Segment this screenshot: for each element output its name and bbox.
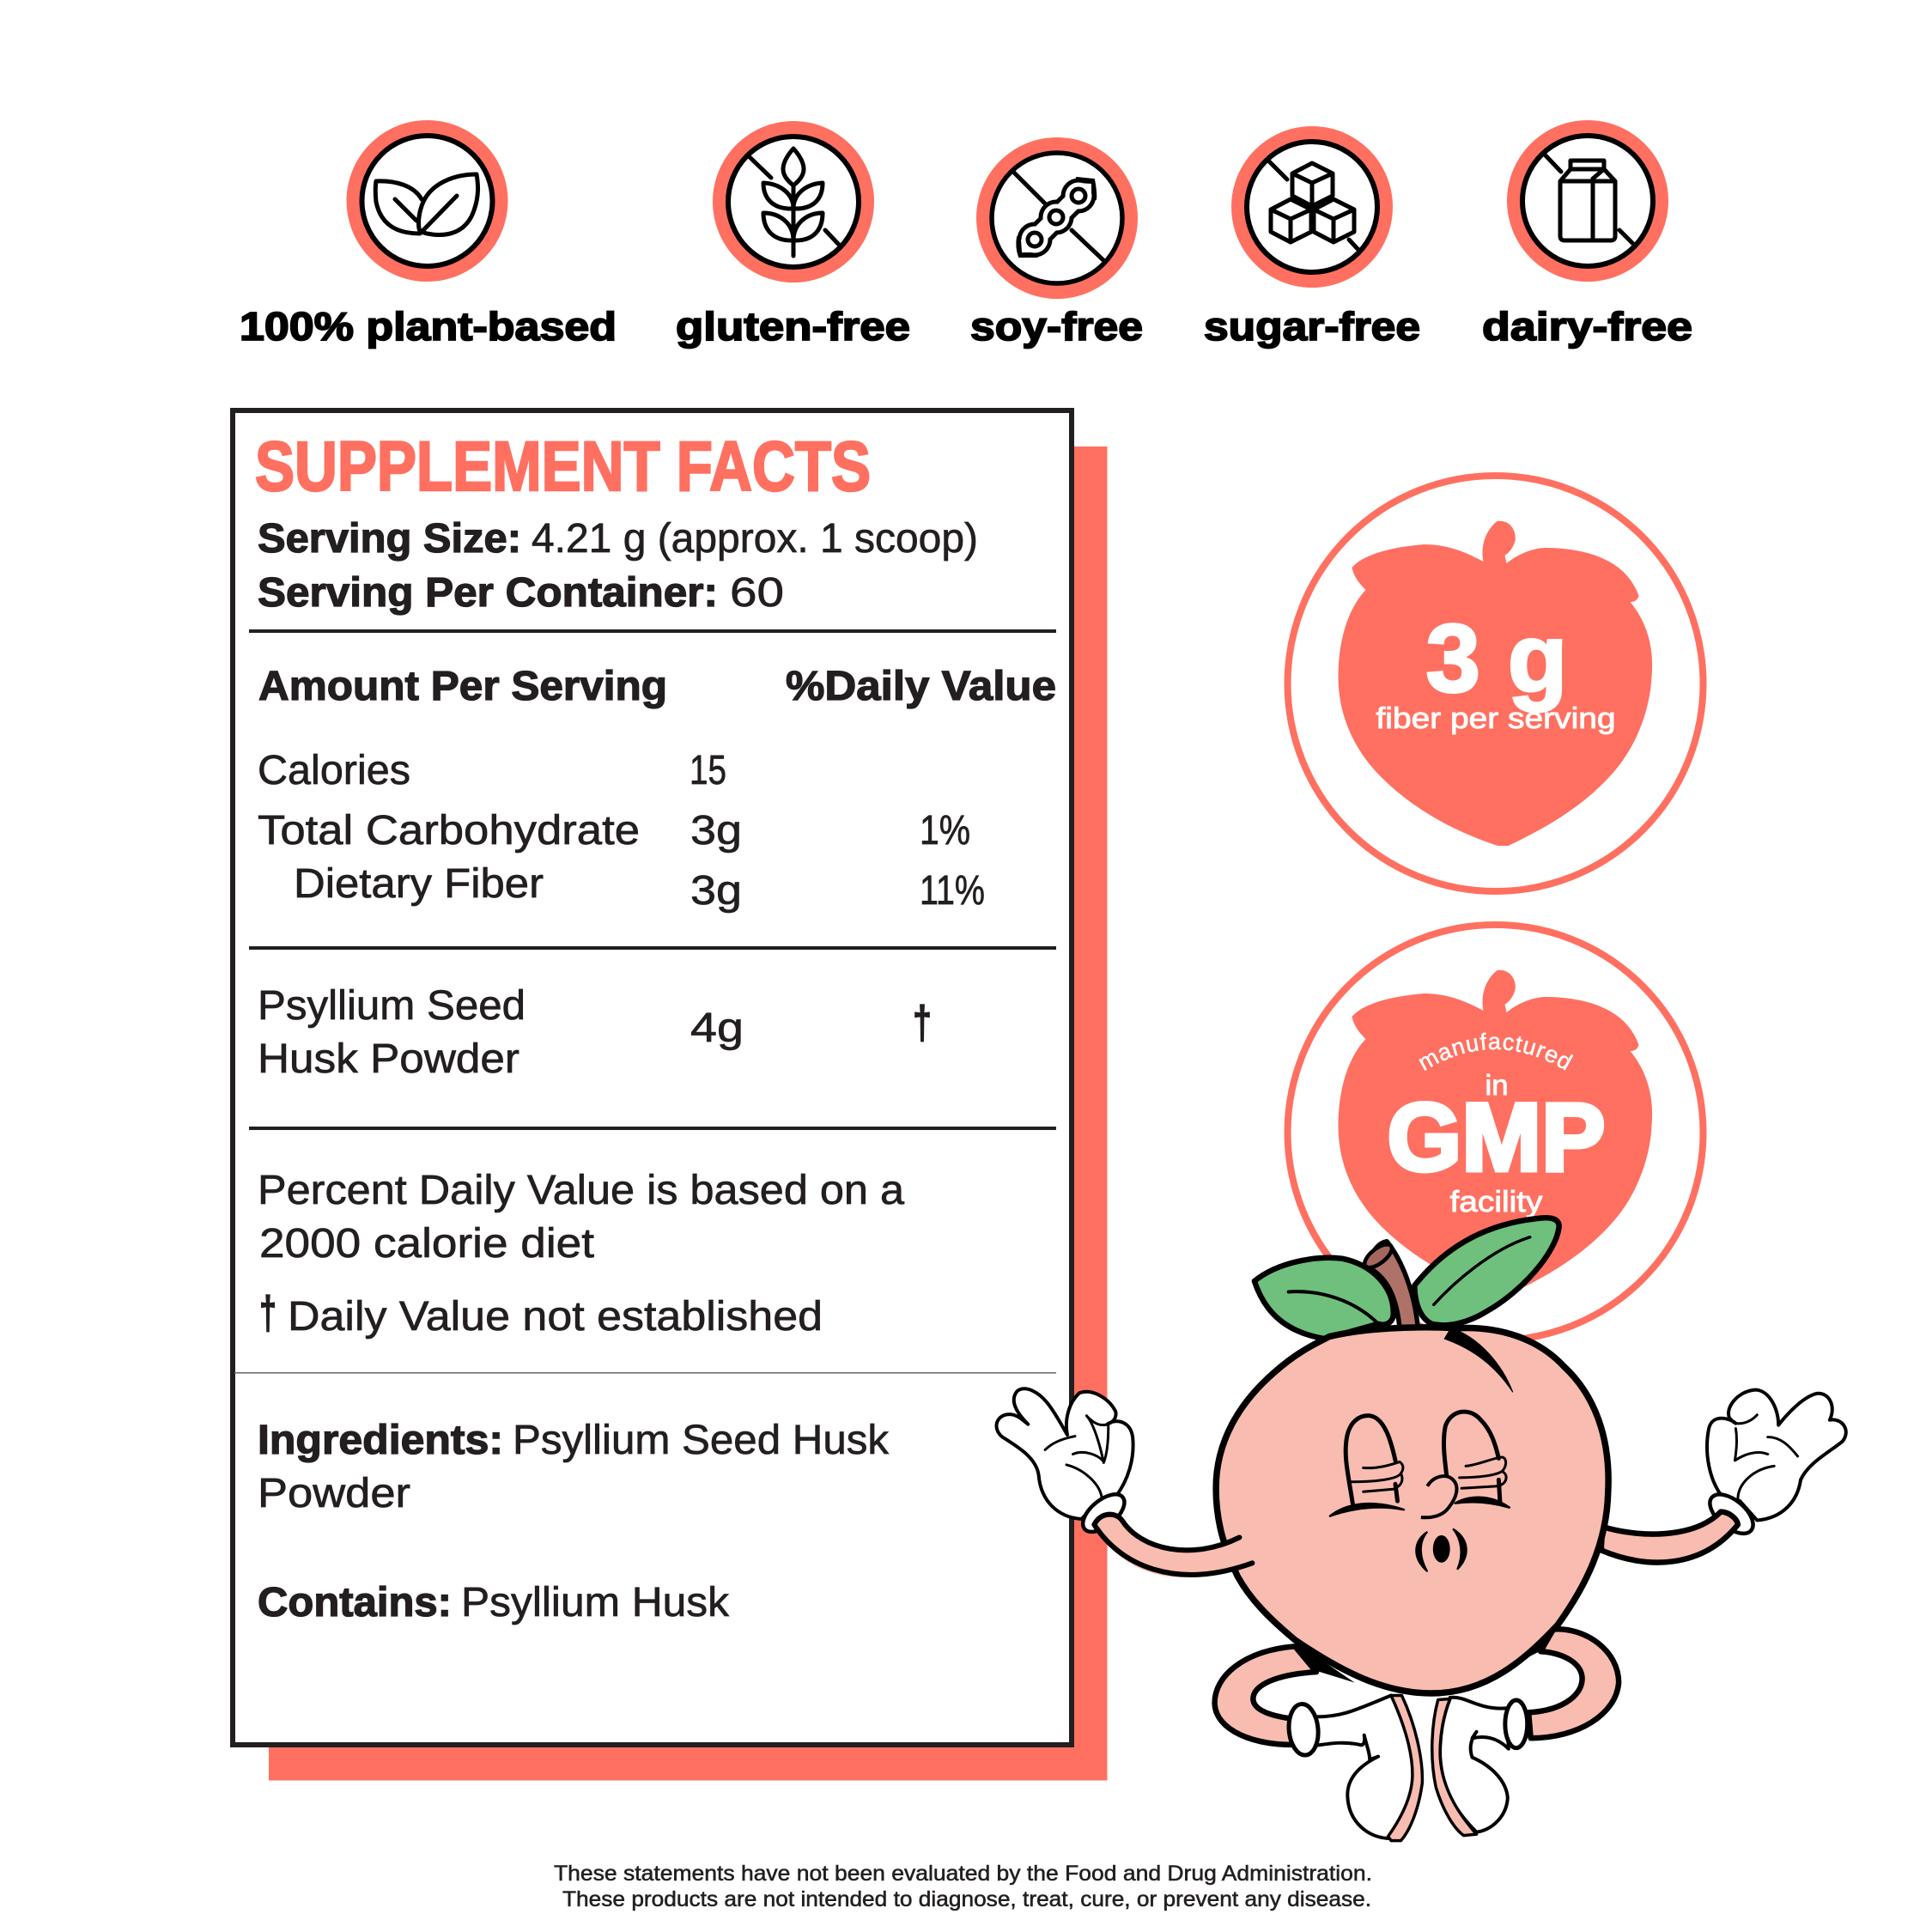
left leg	[1215, 1646, 1316, 1745]
row: psyllium: Psyllium Seed	[258, 983, 526, 1029]
nose	[1421, 1476, 1457, 1517]
row: psyllium: †	[913, 997, 932, 1048]
row: dietary fiber: 3g	[690, 868, 742, 914]
contains: Psyllium Husk	[461, 1580, 730, 1625]
note: daily value: †	[259, 1287, 276, 1339]
label: dairy-free: dairy-free	[1482, 304, 1692, 349]
badge: GMP facility: manufactured	[1419, 1032, 1573, 1071]
badge: 3 g fiber: fiber per serving	[1376, 702, 1616, 735]
badge: GMP facility: in	[1485, 1069, 1508, 1101]
right eye	[1443, 1412, 1510, 1508]
row: total carbohydrate: 3g	[690, 808, 742, 854]
contains	[258, 1580, 730, 1625]
column headers: Amount Per Serving	[258, 664, 667, 709]
row: calories: 15	[690, 748, 726, 793]
note: daily value: 2000 calorie diet	[259, 1221, 594, 1267]
peach mascot	[997, 1218, 1846, 1841]
footer disclaimer: These products are not intended to diagnose, treat, cure, or prevent any disease.	[562, 1887, 1371, 1911]
icon: plant-based leaves	[347, 120, 508, 282]
ingredients: Ingredients:	[258, 1418, 503, 1463]
row: psyllium: Husk Powder	[258, 1036, 519, 1082]
ingredients: Psyllium Seed Husk	[513, 1418, 890, 1463]
column headers	[258, 664, 1056, 709]
note: daily value: Daily Value not established	[288, 1294, 823, 1340]
serving size: 4.21 g (approx. 1 scoop)	[532, 516, 978, 562]
footer disclaimer	[554, 1862, 1372, 1911]
serving size: Serving Size:	[258, 516, 521, 562]
icon: dairy-free carton	[1507, 120, 1668, 282]
body crease	[1444, 1328, 1513, 1392]
stem	[1361, 1240, 1418, 1328]
left eye	[1330, 1416, 1404, 1516]
row: total carbohydrate	[258, 808, 970, 854]
row: dietary fiber: 11%	[920, 868, 985, 914]
row: dietary fiber	[294, 861, 985, 914]
badge: GMP facility	[1285, 921, 1707, 1340]
row: psyllium: 4g	[690, 1005, 744, 1051]
left foot	[1287, 1695, 1422, 1841]
footer disclaimer: These statements have not been evaluated by the Food and Drug Administration.	[554, 1862, 1372, 1886]
ingredients	[258, 1418, 890, 1516]
icon: gluten-free wheat	[713, 121, 874, 283]
serving size	[258, 516, 978, 562]
row: calories: Calories	[258, 748, 410, 793]
heading: supplement facts: SUPPLEMENT FACTS	[255, 428, 871, 506]
column headers: %Daily Value	[786, 664, 1056, 709]
left arm	[1094, 1514, 1252, 1577]
row: calories	[258, 748, 726, 793]
badge: GMP facility: GMP	[1388, 1084, 1606, 1191]
contains: Contains:	[258, 1580, 452, 1625]
panel shadow	[269, 447, 1108, 1781]
mouth	[1416, 1529, 1467, 1571]
row: total carbohydrate: 1%	[920, 808, 970, 854]
servings per container: 60	[730, 570, 784, 616]
note: daily value	[258, 1168, 904, 1340]
panel: supplement facts	[233, 410, 1072, 1745]
right leaf	[1414, 1218, 1559, 1325]
right leg	[1528, 1629, 1619, 1738]
note: daily value: Percent Daily Value is based on a	[258, 1168, 904, 1213]
servings per container: Serving Per Container:	[258, 570, 718, 616]
label: gluten-free: gluten-free	[676, 304, 910, 349]
label: sugar-free: sugar-free	[1204, 304, 1420, 349]
row: total carbohydrate: Total Carbohydrate	[258, 808, 640, 854]
icon: soy-free pod	[976, 137, 1138, 299]
badge: 3 g fiber: 3 g	[1425, 605, 1568, 712]
badge: 3 g fiber	[1288, 476, 1704, 891]
badge: GMP facility: facility	[1449, 1186, 1542, 1218]
right foot	[1432, 1698, 1528, 1836]
left leaf	[1255, 1258, 1394, 1339]
right arm	[1601, 1512, 1738, 1563]
row: psyllium	[258, 983, 932, 1082]
body shadow wedges	[1295, 1625, 1558, 1683]
body	[1216, 1327, 1608, 1693]
right glove	[1703, 1390, 1846, 1540]
label: 100% plant-based: 100% plant-based	[240, 304, 617, 349]
ingredients: Powder	[258, 1471, 410, 1516]
icon: sugar-free cubes	[1231, 126, 1393, 288]
label: soy-free: soy-free	[970, 304, 1143, 349]
row: dietary fiber: Dietary Fiber	[294, 861, 544, 907]
left glove	[997, 1388, 1133, 1539]
